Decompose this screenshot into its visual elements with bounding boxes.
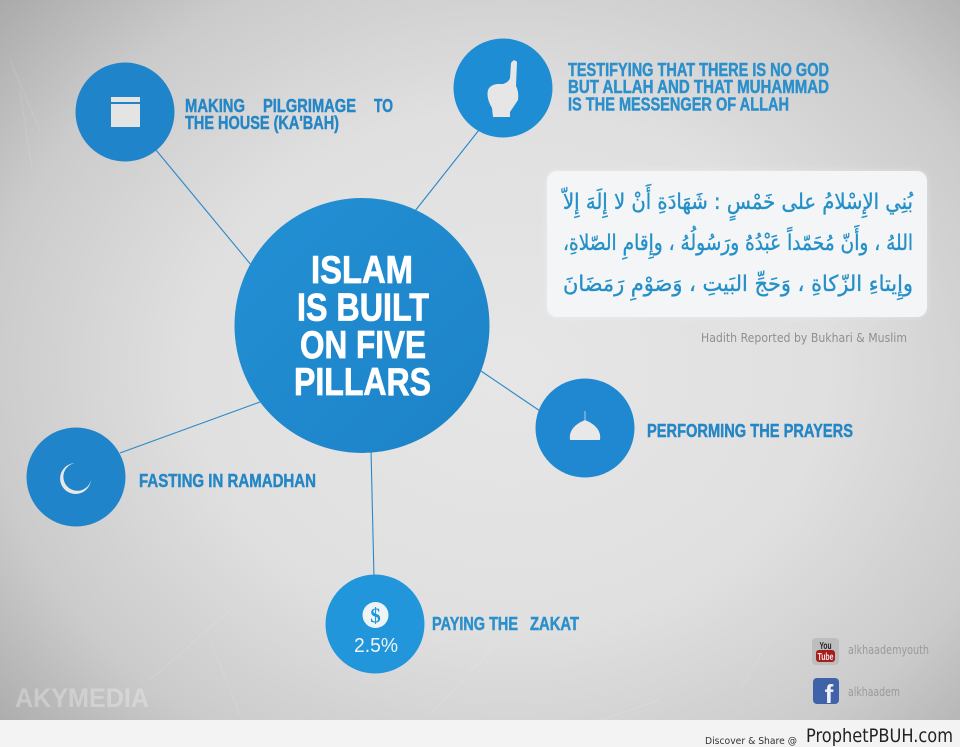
zakat label: ZAKAT [530,614,579,634]
pilgrimage label: PILGRIMAGE [263,95,356,116]
icon: crescent moon [60,463,91,494]
hub title: PILLARS [294,361,431,404]
pillar: fasting [26,428,316,526]
fasting label: FASTING IN RAMADHAN [139,470,316,491]
social: Facebook [813,678,900,709]
footer: discover and share: Discover & Share @ [705,736,797,747]
testimony label: TESTIFYING THAT THERE IS NO GOD [568,60,829,80]
testimony label [568,60,829,114]
social: YouTube [812,638,929,665]
watermark: AKYMEDIA: AKYMEDIA [15,683,149,713]
icon: dollar coin: $ [370,604,381,628]
icon: YouTube [812,638,839,665]
pilgrimage label: TO [374,95,393,116]
Arabic text: وإِيتاءِ الزّكاةِ ، وَحَجِّ البَيتِ ، وَصَوْمِ رَمَضَانَ [563,271,913,301]
zakat percentage: 2.5% [354,635,398,657]
pillar: pilgrimage [76,62,393,162]
Arabic text [561,183,914,301]
hub title: IS BUILT [297,286,429,330]
testimony label: BUT ALLAH AND THAT MUHAMMAD [568,77,829,97]
panel: hadith in Arabic [547,171,927,317]
social: YouTube: alkhaademyouth [848,643,929,657]
footer bar [0,720,960,747]
pillar: zakat [326,574,579,674]
icon: kaaba [111,97,140,127]
pilgrimage label: THE HOUSE (KA'BAH) [185,112,339,133]
pillar: testimony [454,38,829,138]
hub title: ISLAM [311,249,413,292]
Arabic text: بُنِي الإِسْلامُ على خَمْسٍ : شَهَادَةِ أَنْ لا إِلَهَ إِلاّ [561,183,914,221]
social: Facebook: alkhaadem [848,685,900,699]
connector lines [120,130,543,578]
hub title [294,249,431,404]
icon: mosque dome [570,411,600,440]
hub title: ON FIVE [300,324,426,367]
icon: Facebook: f [825,679,834,709]
icon: dollar coin [362,602,388,628]
pillar: prayers [536,378,853,478]
testimony label: IS THE MESSENGER OF ALLAH [568,94,789,114]
pilgrimage label [185,95,393,133]
zakat label: PAYING THE [432,614,518,634]
pilgrimage label: MAKING [185,95,245,116]
prayers label: PERFORMING THE PRAYERS [647,421,853,441]
icon: YouTube: Tube [818,652,834,663]
hadith attribution: Hadith Reported by Bukhari & Muslim [701,331,907,345]
icon: raised finger hand [488,60,518,117]
central hub: Islam is built on five pillars [234,198,490,453]
icon: YouTube: You [820,641,832,652]
